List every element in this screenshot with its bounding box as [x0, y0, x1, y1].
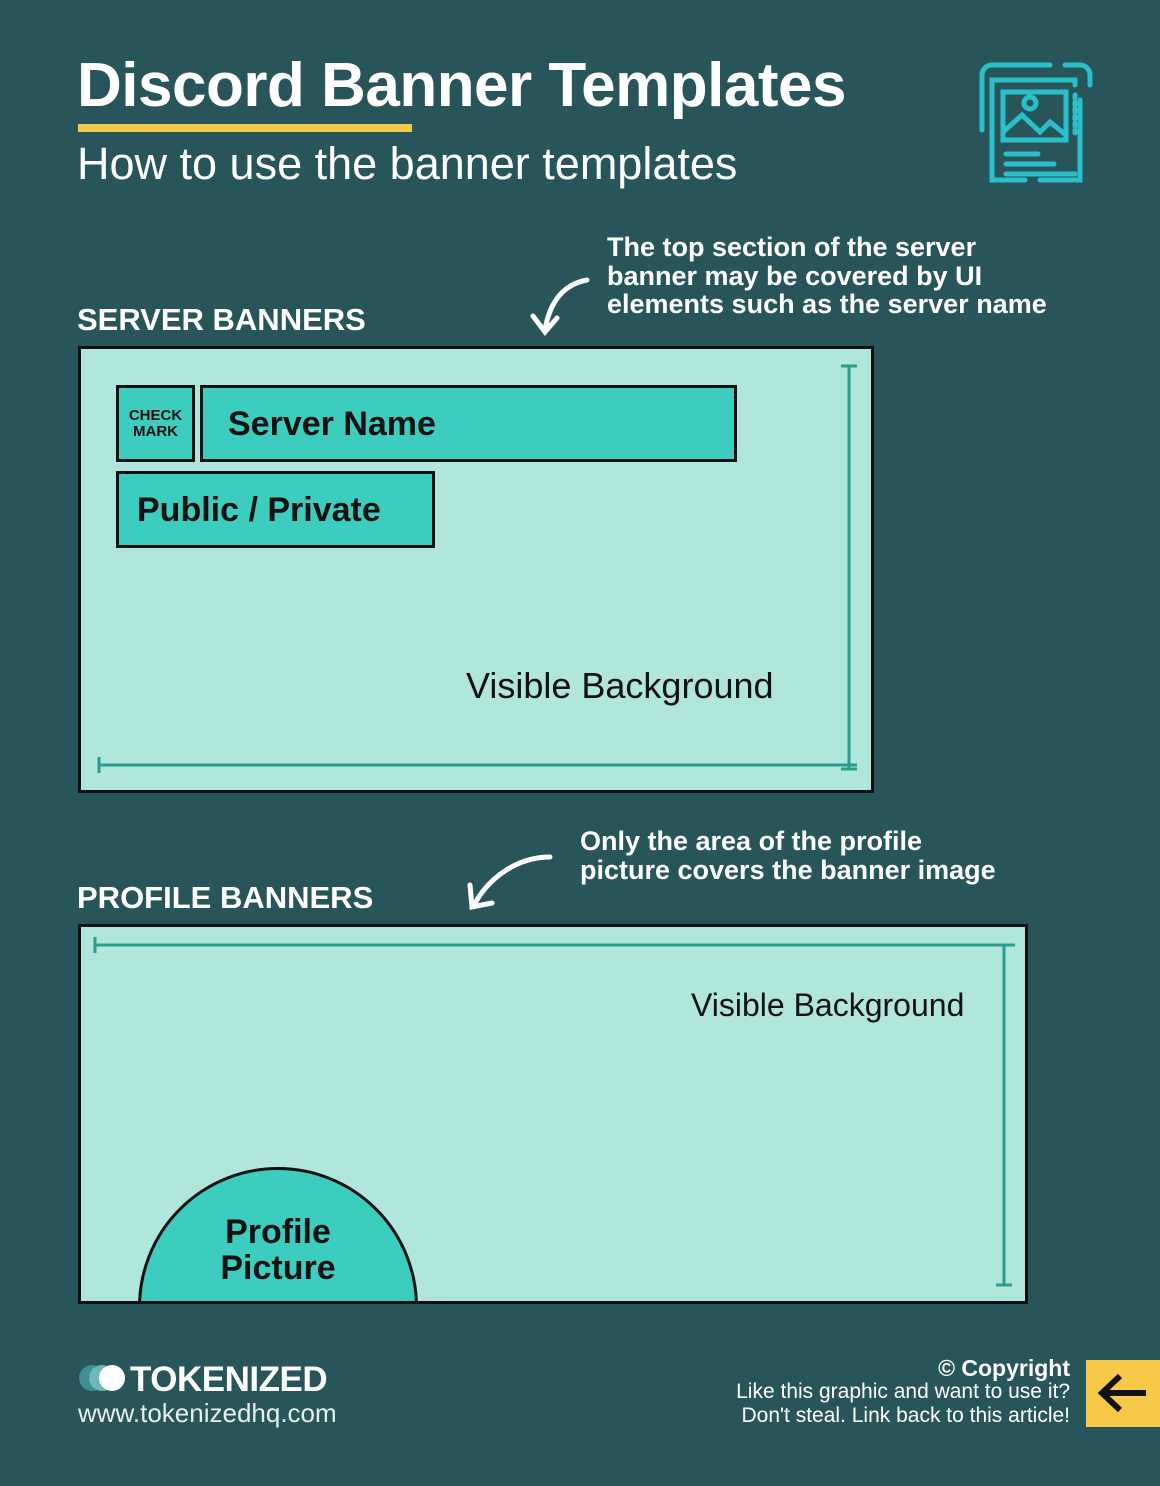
copyright text: Don't steal. Link back to this article! — [742, 1404, 1070, 1427]
callout: server note: elements such as the server name — [607, 289, 1047, 319]
check mark box — [116, 385, 195, 462]
arrow: profile — [468, 854, 552, 910]
title: Discord Banner Templates — [77, 51, 846, 120]
title underline — [78, 124, 412, 132]
server name box: Server Name — [228, 405, 436, 443]
panel: server banner — [78, 346, 874, 793]
callout: server note — [607, 232, 1047, 319]
panel: profile banner — [78, 924, 1028, 1304]
callout: server note: banner may be covered by UI — [607, 260, 982, 290]
copyright text: © Copyright — [938, 1355, 1070, 1381]
icon: banner template — [980, 62, 1092, 182]
profile picture — [138, 1167, 418, 1447]
check mark box: CHECK — [129, 407, 182, 424]
dimension lines — [98, 364, 857, 773]
arrow: server — [530, 278, 590, 336]
icon: back arrow — [1086, 1360, 1160, 1427]
callout: profile note: Only the area of the profile — [580, 826, 922, 856]
server name box — [200, 385, 737, 462]
callout: profile note — [580, 826, 996, 884]
copyright text — [736, 1355, 1070, 1427]
callout: profile note: picture covers the banner image — [580, 854, 996, 884]
profile picture: Profile — [225, 1213, 331, 1251]
dimension lines — [94, 937, 1015, 1286]
check mark box: MARK — [133, 423, 178, 440]
public/private box: Public / Private — [137, 491, 381, 529]
callout: server note: The top section of the server — [607, 232, 976, 262]
footer url: www.tokenizedhq.com — [78, 1398, 337, 1428]
footer logo: TOKENIZED — [130, 1360, 327, 1399]
heading: server banners: SERVER BANNERS — [77, 302, 366, 337]
public/private box — [116, 471, 435, 548]
profile picture: Picture — [220, 1249, 336, 1287]
copyright text: Like this graphic and want to use it? — [736, 1380, 1070, 1403]
label: visible background: Visible Background — [691, 987, 964, 1023]
subtitle: How to use the banner templates — [77, 138, 737, 189]
label: visible background: Visible Background — [466, 665, 774, 706]
heading: profile banners: PROFILE BANNERS — [77, 880, 373, 915]
